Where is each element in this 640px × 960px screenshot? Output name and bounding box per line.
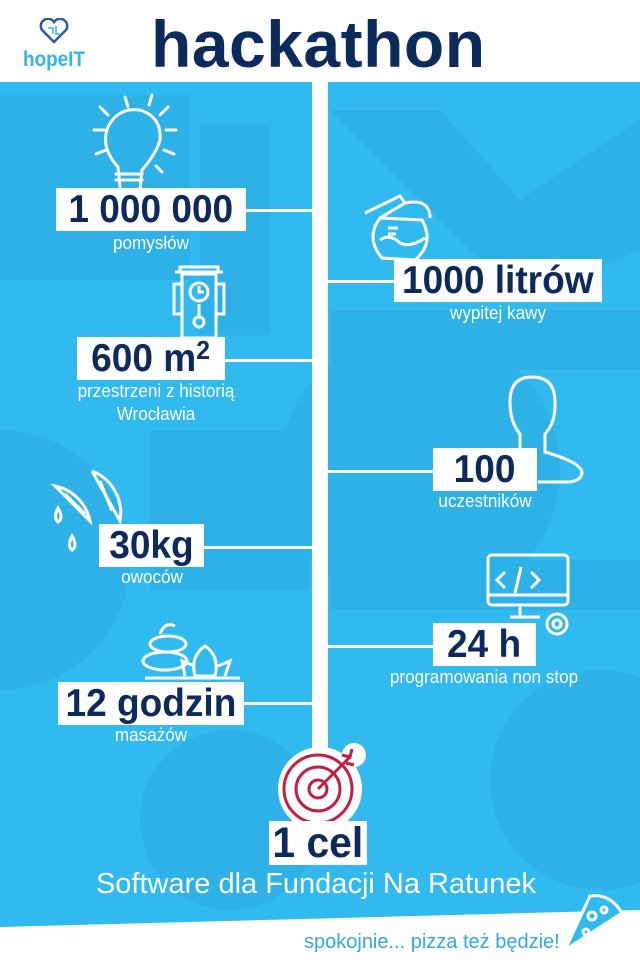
icon: coffee pot [364,194,432,260]
footer text: spokojnie... pizza też będzie! [304,931,560,953]
text: pomysłów [113,233,189,253]
text: programowania non stop [390,667,578,687]
text: masażów [115,725,187,745]
text: owoców [121,567,183,587]
title: hackathon [151,7,486,81]
text: wypitej kawy [450,303,546,323]
icon: monitor with gear [486,554,570,636]
icon: person [508,376,584,484]
icon: light bulb [92,94,178,188]
text: przestrzeni z historią [78,381,234,401]
timeline line [312,82,328,762]
text: uczestników [438,491,532,511]
stat: 30kg: 30kg [109,524,194,567]
stat: 100 [433,448,537,491]
icon: clock [172,266,226,337]
stat: 24 h: 24 h [447,623,522,666]
text: Wrocławia [117,404,195,424]
connectors [246,209,312,212]
stat: 100: 100 [454,448,516,491]
icon: target [278,743,366,821]
icon: lemon [50,470,122,552]
icon: spa stones [142,623,240,680]
header logo: hopeIT [23,48,85,71]
header logo [23,18,85,71]
stat: 12 godzin: 12 godzin [66,682,236,725]
stat: 1000 litrów: 1000 litrów [402,259,594,302]
subtitle: Software dla Fundacji Na Ratunek [96,868,536,900]
icon: pizza [568,894,622,946]
stat: 1 000 000: 1 000 000 [69,188,233,231]
